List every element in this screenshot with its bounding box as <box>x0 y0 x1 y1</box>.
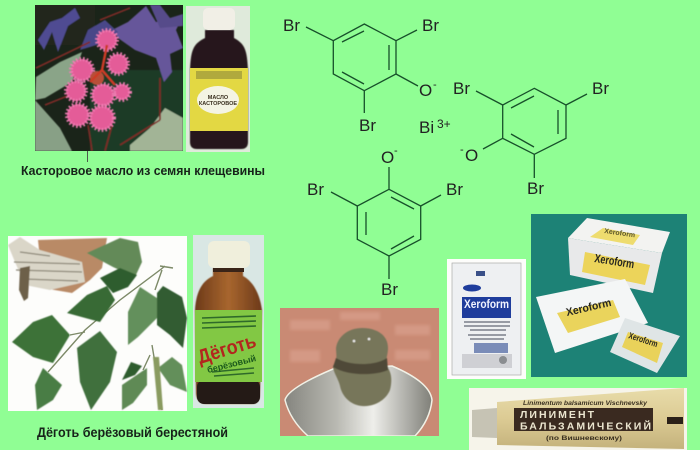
molecule 3: Br <box>446 180 463 199</box>
stem line under photo <box>87 151 88 162</box>
molecule 1: O <box>419 81 432 100</box>
tube: balsamic liniment <box>469 388 687 450</box>
photo: xeroform boxes: Xeroform <box>565 297 613 319</box>
molecule 2 <box>453 79 609 198</box>
molecule 3: O <box>381 148 394 167</box>
photo: castor plant <box>35 5 183 151</box>
birch branch <box>48 266 173 410</box>
xeroform packet: Xeroform <box>464 299 509 311</box>
birch leaves <box>12 238 187 410</box>
molecule 2: Br <box>527 179 544 198</box>
xeroform packet <box>447 259 526 379</box>
photo: ointment on tube <box>280 308 439 436</box>
birch bark <box>8 237 107 301</box>
molecule 1: Br <box>283 16 300 35</box>
caption: birch tar: Дёготь берёзовый берестяной <box>37 425 228 440</box>
molecule 3: Br <box>381 280 398 299</box>
flower cluster <box>66 30 130 130</box>
molecule 1 <box>283 16 439 135</box>
tube: balsamic liniment: (по Вишневскому) <box>546 435 622 442</box>
bottle: birch tar: Дёготь <box>195 330 259 369</box>
photo: birch leaves and bark <box>8 236 187 411</box>
molecule 1: Br <box>359 116 376 135</box>
tube: balsamic liniment: ЛИНИМЕНТ <box>520 409 595 421</box>
molecule 3 <box>307 145 463 299</box>
photo: xeroform boxes: Xeroform <box>594 251 635 271</box>
bottle: castor oil: МАСЛО <box>208 95 229 101</box>
molecule 2: O <box>465 146 478 165</box>
caption: castor oil: Касторовое масло из семян клещевины <box>21 164 265 178</box>
bottle: birch tar <box>193 235 264 408</box>
molecule 2: Br <box>453 79 470 98</box>
bismuth ion: 3+ <box>437 117 451 131</box>
molecule 1: - <box>433 79 437 91</box>
bismuth ion <box>419 117 451 137</box>
molecule 3: - <box>394 145 398 157</box>
photo: xeroform boxes: Xeroform <box>627 330 659 349</box>
tube: balsamic liniment: Linimentum balsamicum Vischnevsky <box>523 400 647 407</box>
tube: balsamic liniment: БАЛЬЗАМИЧЕСКИЙ <box>520 420 651 432</box>
bottle: castor oil <box>186 6 250 152</box>
molecule 2: - <box>460 144 464 156</box>
photo: xeroform boxes: Xeroform <box>604 228 636 239</box>
bottle: birch tar: берёзовый <box>206 353 257 375</box>
molecule 2: Br <box>592 79 609 98</box>
bottle: castor oil: КАСТОРОВОЕ <box>199 101 237 107</box>
bismuth ion: Bi <box>419 118 434 137</box>
photo: xeroform boxes <box>531 214 687 377</box>
molecule 1: Br <box>422 16 439 35</box>
molecule 3: Br <box>307 180 324 199</box>
chemical structure: bismuth tribromophenolate <box>283 16 609 299</box>
